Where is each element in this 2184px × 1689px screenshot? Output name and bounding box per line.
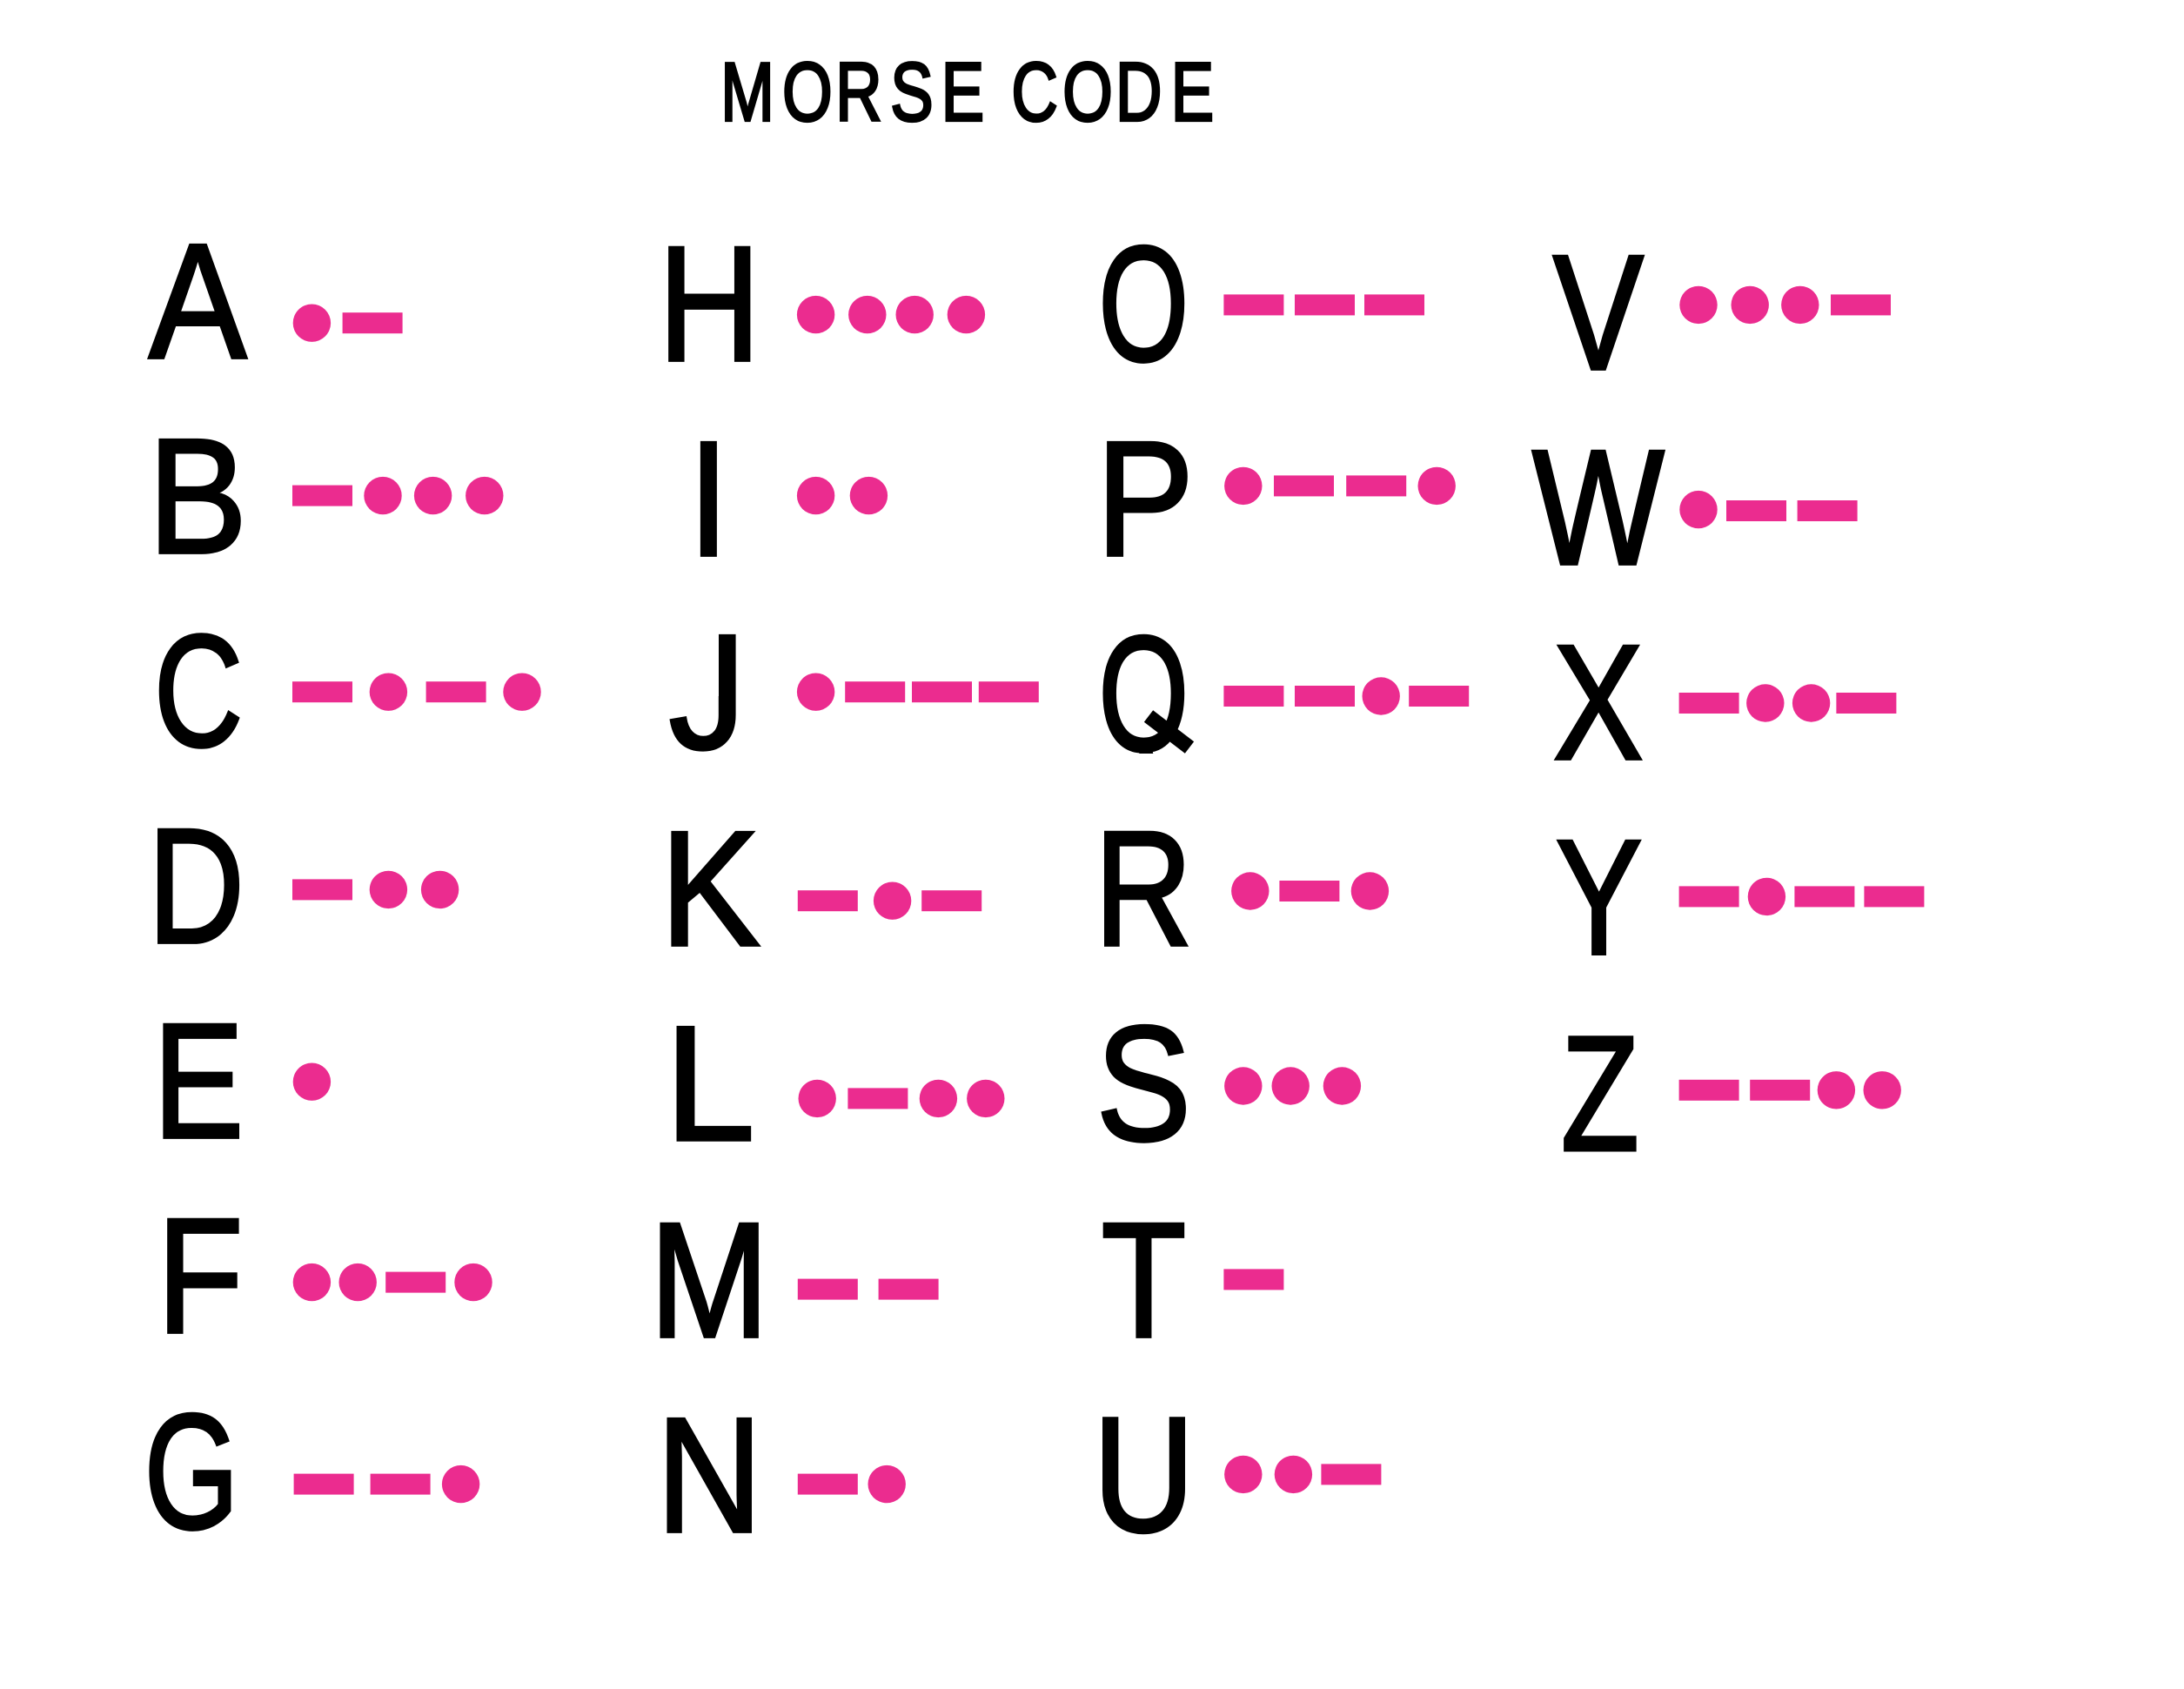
letter S: dot dot dot	[1096, 993, 1361, 1176]
letter B: dash dot dot dot: B	[148, 405, 247, 588]
letter F: dot dot dash dot	[157, 1185, 492, 1368]
letter K: dash dot dash: K	[660, 798, 760, 981]
letter R: dot dash dot: R	[1095, 797, 1192, 980]
letter Z: dash dash dot dot: Z	[1561, 1002, 1639, 1185]
letter E: dot: E	[153, 989, 244, 1172]
letter M: dash dash	[650, 1190, 939, 1371]
letter Z: dash dash dot dot	[1561, 1002, 1901, 1185]
letter V: dot dot dot dash: V	[1553, 221, 1644, 404]
letter I: dot dot	[688, 406, 888, 590]
letter X: dash dot dot dash	[1553, 612, 1896, 794]
letter H: dot dot dot dot	[658, 213, 985, 396]
letter T: dash: T	[1102, 1189, 1186, 1371]
letter C: dash dot dash dot	[154, 601, 541, 780]
letter O: dash dash dash	[1099, 212, 1424, 395]
letter E: dot	[153, 989, 331, 1172]
letter D: dash dot dot	[148, 795, 459, 978]
letter O: dash dash dash: O	[1099, 212, 1189, 395]
letter A: dot dash: A	[149, 210, 246, 392]
letter D: dash dot dot: D	[148, 795, 245, 978]
letter H: dot dot dot dot: H	[658, 213, 760, 396]
letter N: dash dot: N	[656, 1383, 762, 1566]
letter F: dot dot dash dot: F	[157, 1185, 243, 1368]
letter Q: dash dash dot dash	[1102, 633, 1469, 754]
letter R: dot dash dot	[1095, 797, 1389, 980]
letter U: dot dot dash: U	[1093, 1384, 1195, 1566]
letter N: dash dot	[656, 1383, 906, 1566]
letter J: dot dash dash dash: J	[669, 600, 746, 783]
letter L: dot dash dot dot: L	[665, 992, 755, 1175]
letter Y: dash dot dash dash	[1556, 806, 1924, 989]
letter A: dot dash	[149, 210, 403, 392]
title: MORSE CODE	[720, 45, 1214, 139]
letter P: dot dash dash dot: P	[1096, 407, 1194, 590]
letter W: dot dash dash: W	[1532, 417, 1665, 600]
letter X: dash dot dot dash: X	[1553, 612, 1643, 794]
letter Q: dash dash dot dash: Q	[1099, 602, 1189, 785]
letter P: dot dash dash dot	[1096, 407, 1456, 590]
letter K: dash dot dash	[660, 798, 981, 981]
letter G: dash dash dot	[144, 1381, 479, 1564]
letter T: dash	[1102, 1189, 1283, 1371]
letter L: dot dash dot dot	[665, 992, 1005, 1175]
letter B: dash dot dot dot	[148, 405, 503, 588]
letter S: dot dot dot: S	[1096, 993, 1191, 1176]
letter G: dash dash dot: G	[144, 1381, 238, 1564]
letter M: dash dash: M	[650, 1190, 769, 1371]
letter C: dash dot dash dot: C	[154, 601, 243, 780]
letter I: dot dot: I	[688, 406, 729, 590]
letter V: dot dot dot dash	[1553, 221, 1891, 404]
letter W: dot dash dash	[1532, 417, 1858, 600]
letter J: dot dash dash dash	[669, 600, 1039, 783]
letter Y: dash dot dash dash: Y	[1556, 806, 1642, 989]
letter U: dot dot dash	[1093, 1384, 1381, 1566]
